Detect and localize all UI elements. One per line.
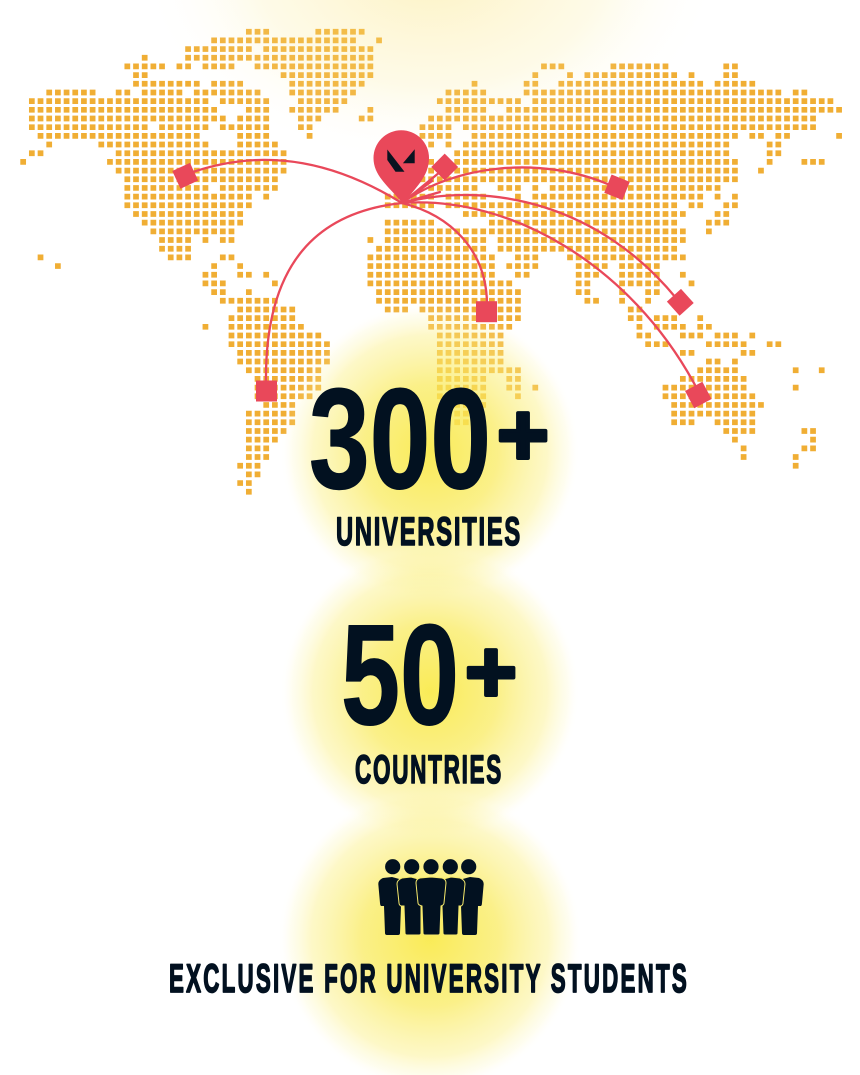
stat: 50+: + — [465, 622, 517, 721]
glow behind people icon — [278, 786, 582, 1075]
glow behind 50+ — [280, 542, 580, 842]
world dot map — [20, 32, 842, 492]
icon: location pin with logo — [374, 130, 429, 204]
destination markers — [172, 154, 712, 408]
label: countries: COUNTRIES — [355, 748, 503, 792]
stat: 300+: 300 — [309, 360, 491, 519]
top glow — [140, 0, 720, 165]
route arcs — [190, 160, 695, 385]
stat: 300+: + — [497, 385, 549, 484]
stat: 50+: 50 — [341, 596, 459, 755]
glow behind 300+ — [280, 302, 580, 602]
icon: group of students — [378, 859, 484, 935]
label: universities: UNIVERSITIES — [336, 510, 522, 554]
